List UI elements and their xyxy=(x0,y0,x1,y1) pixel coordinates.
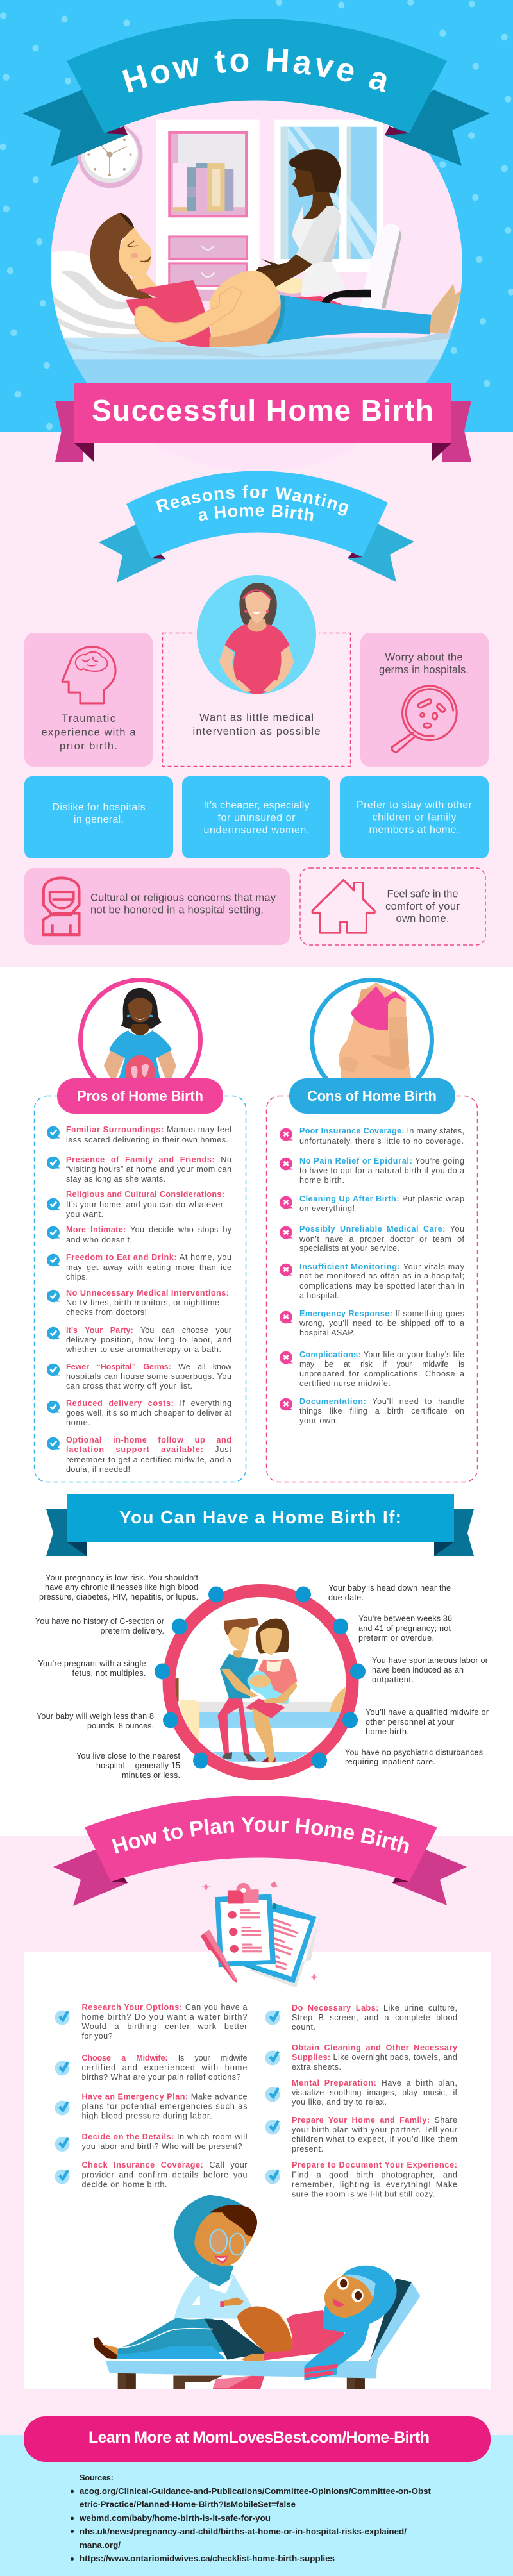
cons list text: unfortunately, there’s little to no coverage. xyxy=(299,1137,464,1146)
check icons xyxy=(47,1126,60,1450)
pros list text: may get away with eating more than ice xyxy=(66,1263,231,1272)
panel: cultural concerns xyxy=(24,868,290,945)
bottom ribbon xyxy=(74,383,451,443)
panel: germs worry: germs in hospitals. xyxy=(379,664,469,676)
call to action pill xyxy=(24,2416,491,2462)
plan list right column: Do Necessary Labs: Like urine culture, xyxy=(292,2003,457,2012)
left requirement texts: fetus, not multiples. xyxy=(72,1669,146,1678)
plan list left column: certified and experienced with home xyxy=(82,2063,248,2072)
plan list left column: Choose a Midwife: Is your midwife xyxy=(82,2053,248,2062)
right requirement texts: preterm or overdue. xyxy=(358,1634,434,1643)
bottom ribbon folds xyxy=(74,443,451,462)
diagram: ring of requirements xyxy=(35,1573,489,1780)
plan list right column: Prepare Your Home and Family: Share xyxy=(292,2116,457,2125)
sources list: nhs.uk/news/pregnancy-and-child/births-at-home-or-in-hospital-risks-explained/ xyxy=(80,2527,407,2536)
ring dots xyxy=(155,1586,366,1768)
right requirement texts: other personnel at your xyxy=(366,1718,454,1727)
plan list right column: your birth plan with your partner. Tell your xyxy=(292,2125,457,2134)
cons list text: to have to opt for a natural birth if you do a xyxy=(299,1166,464,1175)
left requirement texts: preterm delivery. xyxy=(100,1627,164,1635)
cons list text: specialists at your service. xyxy=(299,1244,399,1253)
panel: feel safe at home: comfort of your xyxy=(385,901,460,912)
pros list text: chips. xyxy=(66,1273,88,1282)
cons list text: not be monitored as often as in a hospital; xyxy=(299,1271,464,1280)
panel: cultural concerns: Cultural or religious concerns that may xyxy=(90,892,276,904)
hero sky background xyxy=(0,0,513,432)
pros list text: whether to use aromatherapy or a bath. xyxy=(65,1345,221,1354)
cons list text: things like filing a birth certificate on xyxy=(299,1407,464,1416)
plan list left column: births? What are your pain relief options? xyxy=(82,2073,241,2082)
plan list right column: Find a good birth photographer, and xyxy=(292,2171,457,2180)
cons list text: Emergency Response: If something goes xyxy=(299,1309,464,1318)
cons list text: on everything! xyxy=(299,1204,355,1213)
pregnant woman lying on bed xyxy=(90,213,460,347)
plan list left column: for you? xyxy=(82,2032,113,2041)
plan list right column: Strep B screen, and a complete blood xyxy=(292,2013,457,2022)
plan list right column: children what to expect, if you’d like them xyxy=(292,2135,457,2144)
pros list text: doula, if needed! xyxy=(66,1465,130,1474)
plan list left column: provider and confirm details before you xyxy=(82,2171,248,2180)
left requirement texts: have any chronic illnesses like high blood xyxy=(45,1583,198,1592)
panel: cons of home birth xyxy=(267,980,477,1482)
right requirement texts: Your baby is head down near the xyxy=(328,1584,451,1593)
pros pill heading xyxy=(57,1078,223,1114)
pros list text: checks from doctors! xyxy=(66,1308,147,1317)
panel: stay with family xyxy=(340,776,489,858)
pros list text: More Intimate: You decide who stops by xyxy=(66,1225,232,1234)
panel: stay with family: Prefer to stay with other xyxy=(357,800,473,810)
ring with family illustration xyxy=(168,1589,353,1774)
right requirement texts: You have spontaneous labor or xyxy=(372,1656,488,1665)
plan list right column: present. xyxy=(292,2145,323,2154)
cons list text: Documentation: You’ll need to handle xyxy=(299,1397,464,1406)
plan list right column: Supplies: Like overnight pads, towels, and xyxy=(292,2053,457,2062)
illustration: couple with baby xyxy=(175,1618,346,1762)
illustration: pregnant woman in circle xyxy=(194,572,319,698)
panel: traumatic experience xyxy=(24,633,153,767)
plan list left column: Decide on the Details: In which room will xyxy=(82,2132,248,2141)
call to action pill: Learn More at MomLovesBest.com/Home-Birth xyxy=(88,2429,430,2446)
icon: clipboard and pen xyxy=(200,1882,319,1988)
hero room circle xyxy=(51,60,462,472)
sources list: webmd.com/baby/home-birth-is-it-safe-for-you xyxy=(79,2513,271,2523)
panel: cultural concerns: not be honored in a hospital setting. xyxy=(90,904,264,916)
panel: cheaper: for uninsured or xyxy=(218,813,296,823)
page background: light blue footer xyxy=(0,2435,513,2576)
pros list text: “visiting hours” at home and your mom can xyxy=(66,1165,231,1174)
top ribbon tails xyxy=(22,90,490,167)
pros list text xyxy=(65,1125,232,1474)
panel: traumatic experience: prior birth. xyxy=(60,740,117,752)
pros list text: lactation support available: Just xyxy=(66,1445,232,1454)
cons list text: home birth. xyxy=(299,1176,344,1185)
cons list text: a hospital. xyxy=(299,1291,339,1300)
left requirement texts: You have no history of C-section or xyxy=(35,1617,164,1626)
pros list text: Freedom to Eat and Drink: At home, you xyxy=(66,1253,231,1262)
panel: dislike for hospitals xyxy=(24,776,173,858)
cross icons xyxy=(280,1128,293,1410)
left requirement texts: pounds, 8 ounces. xyxy=(87,1721,154,1730)
cons list text: your own. xyxy=(299,1416,338,1425)
pros list text: stay as long as she wants. xyxy=(66,1175,165,1183)
pros list text: remember to get a certified midwife, and a xyxy=(66,1455,231,1464)
hero bed and pillows xyxy=(49,224,464,388)
left requirement texts: You’re pregnant with a single xyxy=(38,1659,146,1668)
panel: cheaper: It’s cheaper, especially xyxy=(204,800,309,811)
pros list text: you want. xyxy=(66,1210,103,1219)
cons list text: may be at risk if your midwife is xyxy=(299,1360,464,1369)
heading ribbon: reasons xyxy=(99,471,414,583)
sources list: mana.org/ xyxy=(80,2540,121,2550)
panel: little medical intervention xyxy=(163,572,350,767)
hero snow dots xyxy=(0,0,513,430)
left requirement texts: You live close to the nearest xyxy=(76,1752,181,1761)
page background: white middle section xyxy=(0,967,513,1836)
sources list: acog.org/Clinical-Guidance-and-Publications/Committee-Opinions/Committee-on-Obst xyxy=(80,2486,432,2496)
cons list text xyxy=(299,1126,465,1425)
heading ribbon: reasons: a Home Birth xyxy=(199,505,314,521)
pros list text: Presence of Family and Friends: No xyxy=(66,1155,231,1164)
plan list left column xyxy=(82,2003,248,2189)
left requirement texts: Your pregnancy is low-risk. You shouldn’t xyxy=(46,1573,199,1582)
plan list left column: Check Insurance Coverage: Call your xyxy=(82,2161,248,2170)
plan list left column: decide on home birth. xyxy=(82,2180,167,2189)
window xyxy=(274,120,383,272)
pros list text: Reduced delivery costs: If everything xyxy=(66,1399,231,1408)
pros list text: It’s your home, and you can do whatever xyxy=(66,1200,223,1209)
left requirement texts: hospital -- generally 15 xyxy=(96,1761,180,1770)
pros list text: and who doesn’t. xyxy=(66,1235,132,1244)
icon: woman in head covering xyxy=(43,878,79,935)
wall clock xyxy=(78,122,142,188)
plan list left column: Research Your Options: Can you have a xyxy=(82,2003,248,2012)
heading ribbon: how to plan: How to Plan Your Home Birth xyxy=(112,1817,409,1854)
cons list text: Insufficient Monitoring: Your vitals may xyxy=(299,1262,465,1271)
panel: stay with family: members at home. xyxy=(369,824,459,835)
ring xyxy=(81,980,200,1100)
title line two: Successful Home Birth xyxy=(92,394,433,427)
pros list text: hospitals can house some superbugs. You xyxy=(66,1372,231,1381)
panel: feel safe at home: Feel safe in the xyxy=(387,889,458,900)
panel: feel safe at home xyxy=(300,868,485,945)
plan list left column: home birth? Do you want a water birth? xyxy=(82,2012,248,2021)
cons list text: certified nurse midwife. xyxy=(299,1379,391,1388)
cons list text: Complications: Your life or your baby’s life xyxy=(299,1350,464,1359)
cons pill heading xyxy=(289,1078,455,1114)
panel: traumatic experience: Traumatic xyxy=(62,713,115,724)
cons list text: Cleaning Up After Birth: Put plastic wrap xyxy=(299,1194,464,1203)
title line one: How to Have a xyxy=(122,48,386,92)
cons list text: won’t have a proper doctor or team of xyxy=(299,1235,464,1244)
ring xyxy=(312,980,432,1100)
plan check icons xyxy=(55,2011,280,2184)
panel: little medical intervention: Want as little medical xyxy=(199,712,314,723)
plan list right column: visualize soothing images, play music, if xyxy=(292,2088,458,2097)
left requirement texts: pressure, diabetes, HIV, hepatitis, or lupus. xyxy=(39,1593,198,1602)
pros list text: home. xyxy=(66,1418,90,1427)
cons list text: complications may be spotted later than in xyxy=(299,1282,464,1291)
sources list xyxy=(71,2473,432,2563)
cons list text: Poor Insurance Coverage: In many states, xyxy=(299,1126,464,1135)
pros list text: It’s Your Party: You can choose your xyxy=(66,1326,231,1335)
midwife xyxy=(242,149,347,297)
panel: plan checklist card xyxy=(24,1952,491,2389)
right requirement texts: You’re between weeks 36 xyxy=(358,1614,452,1623)
panel: dislike for hospitals: Dislike for hospitals xyxy=(53,802,145,813)
top ribbon folds xyxy=(105,126,409,135)
top ribbon xyxy=(67,19,447,133)
plan list left column: you labor and birth? Who will be present? xyxy=(82,2142,242,2151)
heading ribbon: reasons: Reasons for Wanting xyxy=(156,485,349,515)
bottom ribbon tails xyxy=(55,401,471,462)
left requirement texts xyxy=(35,1573,199,1780)
plan list right column: remember, lighting is everything! Make xyxy=(292,2180,457,2189)
plan list right column: Mental Preparation: Have a birth plan, xyxy=(292,2078,457,2087)
plan list left column: Would a birthing center work better xyxy=(82,2022,248,2031)
plan list left column: Have an Emergency Plan: Make advance xyxy=(82,2093,248,2102)
panel: feel safe at home: own home. xyxy=(396,913,449,924)
plan list right column xyxy=(292,2003,458,2199)
page background: pink upper section xyxy=(0,432,513,967)
panel: cheaper xyxy=(182,776,330,858)
panel: little medical intervention: intervention as possible xyxy=(192,726,321,737)
sources list: Sources: xyxy=(80,2473,114,2482)
panel: dislike for hospitals: in general. xyxy=(74,814,124,825)
dashed frame xyxy=(35,1096,246,1482)
cons list text: wrong, you’ll need to be shipped off to a xyxy=(299,1319,464,1328)
plan list right column: extra sheets. xyxy=(292,2062,341,2071)
page background: pink plan section xyxy=(0,1836,513,2435)
plan list left column: high blood pressure during labor. xyxy=(82,2112,212,2121)
pros pill heading: Pros of Home Birth xyxy=(77,1088,203,1104)
right requirement texts: You have no psychiatric disturbances xyxy=(345,1748,483,1757)
pros list text: No Unnecessary Medical Interventions: xyxy=(66,1289,229,1298)
right requirement texts: requiring inpatient care. xyxy=(345,1757,435,1766)
plan list right column: Prepare to Document Your Experience: xyxy=(292,2161,457,2170)
pros list text: No IV lines, birth monitors, or nighttime xyxy=(66,1298,219,1307)
heading banner: you can have a home birth if: You Can Have a Home Birth If: xyxy=(119,1507,401,1527)
right requirement texts: home birth. xyxy=(366,1727,409,1736)
heading ribbon: how to plan xyxy=(53,1796,467,1906)
pros list text: Religious and Cultural Considerations: xyxy=(66,1190,224,1199)
right requirement texts: outpatient. xyxy=(372,1675,414,1684)
plan list left column: plans for potential emergencies such as xyxy=(82,2102,248,2111)
cons pill heading: Cons of Home Birth xyxy=(307,1088,437,1104)
lower edge of hero circle xyxy=(157,447,356,471)
hero panel xyxy=(0,0,513,462)
panel: germs worry xyxy=(360,633,489,767)
right requirement texts: You’ll have a qualified midwife or xyxy=(366,1708,489,1717)
plan list right column: Obtain Cleaning and Other Necessary xyxy=(292,2043,457,2052)
illustration: woman with baby footprints xyxy=(104,987,176,1078)
illustration: pregnant torso xyxy=(339,983,412,1080)
panel: pros of home birth xyxy=(35,980,246,1482)
pros list text: goes well, it’s so much cheaper to deliver at xyxy=(66,1409,232,1418)
cons list text: Possibly Unreliable Medical Care: You xyxy=(299,1225,464,1234)
plan list right column: count. xyxy=(292,2023,315,2032)
panel: germs worry: Worry about the xyxy=(385,651,463,663)
pros list text: Fewer “Hospital” Germs: We all know xyxy=(66,1362,232,1371)
right requirement texts: and 41 of pregnancy; not xyxy=(358,1624,451,1633)
cabinet with books and drawers xyxy=(156,120,260,301)
cons list text: No Pain Relief or Epidural: You’re going xyxy=(299,1157,464,1166)
sources list: https://www.ontariomidwives.ca/checklist-home-birth-supplies xyxy=(80,2554,335,2563)
cons list text: hospital ASAP. xyxy=(299,1328,355,1337)
illustration: doctor examining patient xyxy=(93,2195,421,2389)
plan list right column: sure the room is well-lit but still cozy. xyxy=(292,2190,435,2199)
pros list text: delivery position, how long to labor, and xyxy=(66,1335,231,1344)
pros list text: less scared delivering in their own homes. xyxy=(66,1135,228,1144)
panel: traumatic experience: experience with a xyxy=(41,727,136,739)
left requirement texts: minutes or less. xyxy=(122,1771,180,1780)
panel: cheaper: underinsured women. xyxy=(204,824,309,836)
icon: house xyxy=(312,880,374,933)
pros list text: Familiar Surroundings: Mamas may feel xyxy=(66,1125,231,1134)
right requirement texts xyxy=(328,1584,489,1766)
heading banner: you can have a home birth if xyxy=(46,1494,474,1556)
right requirement texts: due date. xyxy=(328,1593,364,1602)
icon: head with brain xyxy=(62,647,115,703)
panel: stay with family: children or family xyxy=(372,812,457,823)
icon: magnifying glass with germs xyxy=(392,686,457,752)
left requirement texts: Your baby will weigh less than 8 xyxy=(37,1712,154,1721)
pros list text: Optional in-home follow up and xyxy=(66,1435,231,1444)
right requirement texts: have been induced as an xyxy=(372,1666,464,1675)
sources list: etric-Practice/Planned-Home-Birth?IsMobileSet=false xyxy=(80,2499,296,2509)
plan list right column: you like, and try to relax. xyxy=(292,2098,387,2107)
cons list text: unprepared for complications. Choose a xyxy=(299,1369,464,1378)
dashed frame xyxy=(267,1096,477,1482)
pros list text: can cross that worry off your list. xyxy=(66,1382,192,1391)
